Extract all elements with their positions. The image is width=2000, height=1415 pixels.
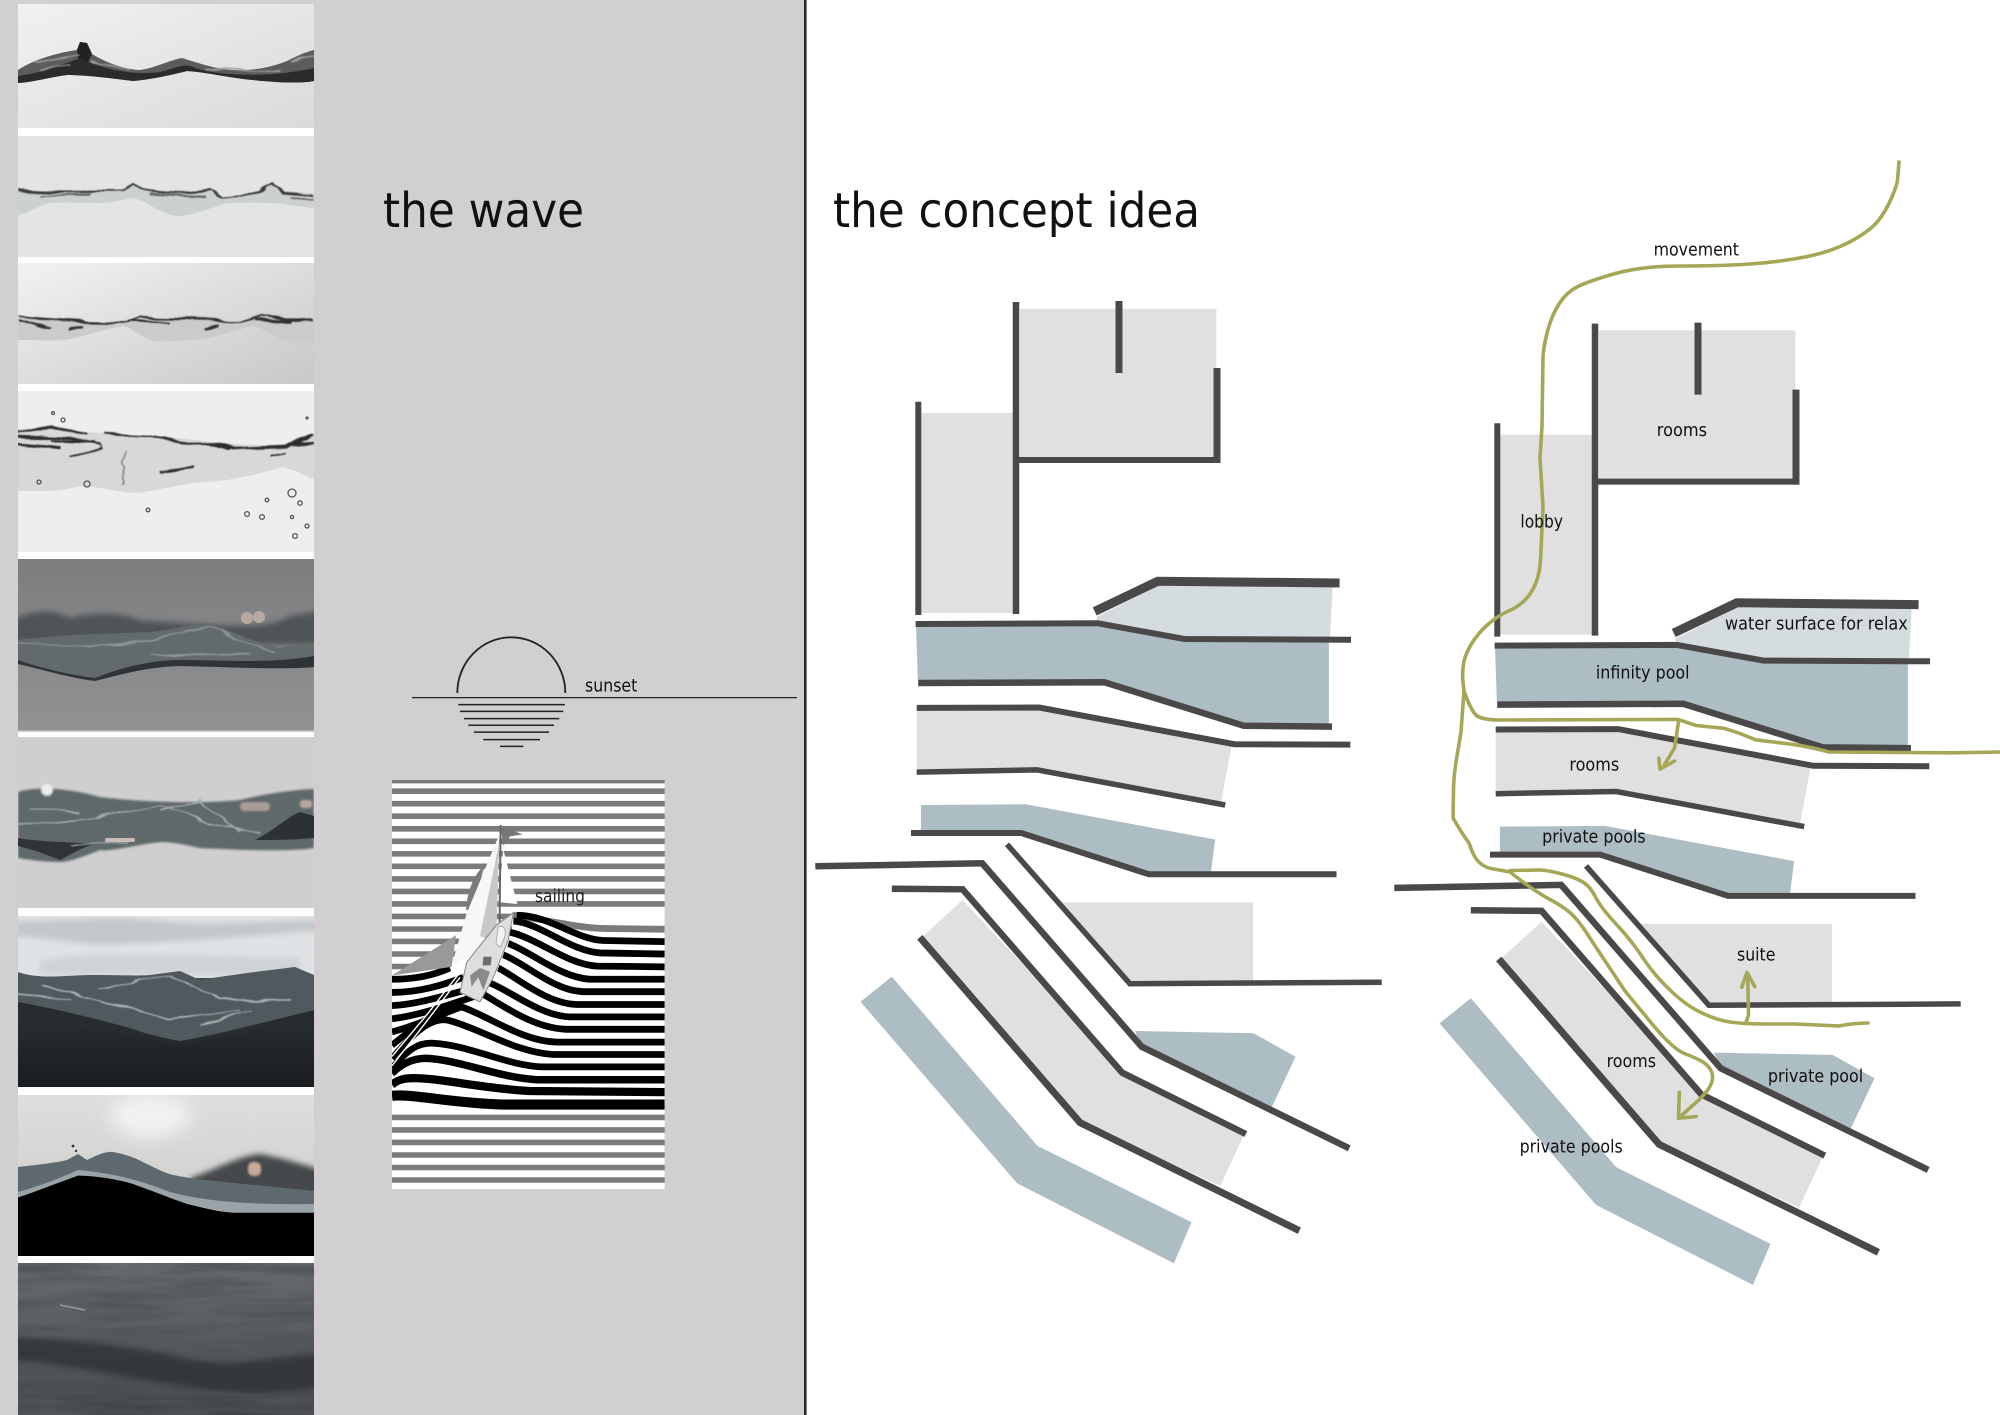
grey horizontal stripes	[392, 781, 665, 1180]
photo: wave over black silhouette	[18, 1094, 324, 1256]
photo: calm water line	[18, 263, 314, 384]
labels: private pools	[1520, 1138, 1623, 1158]
photo: wave with reflections	[18, 737, 314, 908]
labels: suite	[1737, 945, 1775, 965]
labels: private pool	[1768, 1067, 1863, 1087]
icon: sailboat	[392, 825, 523, 1002]
title: the concept idea: the concept idea	[833, 183, 1200, 239]
plan shapes	[1394, 323, 1961, 1285]
labels: rooms	[1607, 1052, 1656, 1072]
labels	[1520, 240, 1908, 1158]
label: sailing: sailing	[535, 887, 585, 907]
white separators behind photos	[18, 128, 314, 1415]
label: sunset: sunset	[585, 676, 637, 696]
diagram: concept plan without annotations	[815, 301, 1382, 1263]
panel: left grey background	[0, 0, 805, 1415]
labels: infinity pool	[1596, 664, 1690, 684]
labels: private pools	[1542, 828, 1646, 848]
labels: water surface for relax	[1725, 615, 1908, 635]
movement path with arrows	[1453, 162, 2000, 1118]
photo: water splash	[18, 391, 314, 552]
photo: dark water ribbon	[18, 4, 314, 128]
labels: movement	[1654, 240, 1739, 260]
icon: sunset	[412, 637, 797, 746]
illustration: sailing over striped waves	[392, 780, 665, 1189]
panel: wave photo strip	[8, 4, 324, 1415]
labels: rooms	[1569, 755, 1619, 775]
diagram: annotated concept plan	[1394, 162, 2000, 1285]
title: the wave: the wave	[383, 183, 584, 239]
photo: wave under cloudy sky	[8, 916, 324, 1087]
photo: dark open sea	[8, 1263, 324, 1415]
photo: blurred grey wave	[10, 559, 324, 732]
labels: lobby	[1520, 513, 1563, 533]
black wave stripes	[392, 915, 665, 1105]
vertical divider between panels	[804, 0, 807, 1415]
photo: thin water line	[18, 136, 314, 257]
labels: rooms	[1657, 421, 1707, 441]
